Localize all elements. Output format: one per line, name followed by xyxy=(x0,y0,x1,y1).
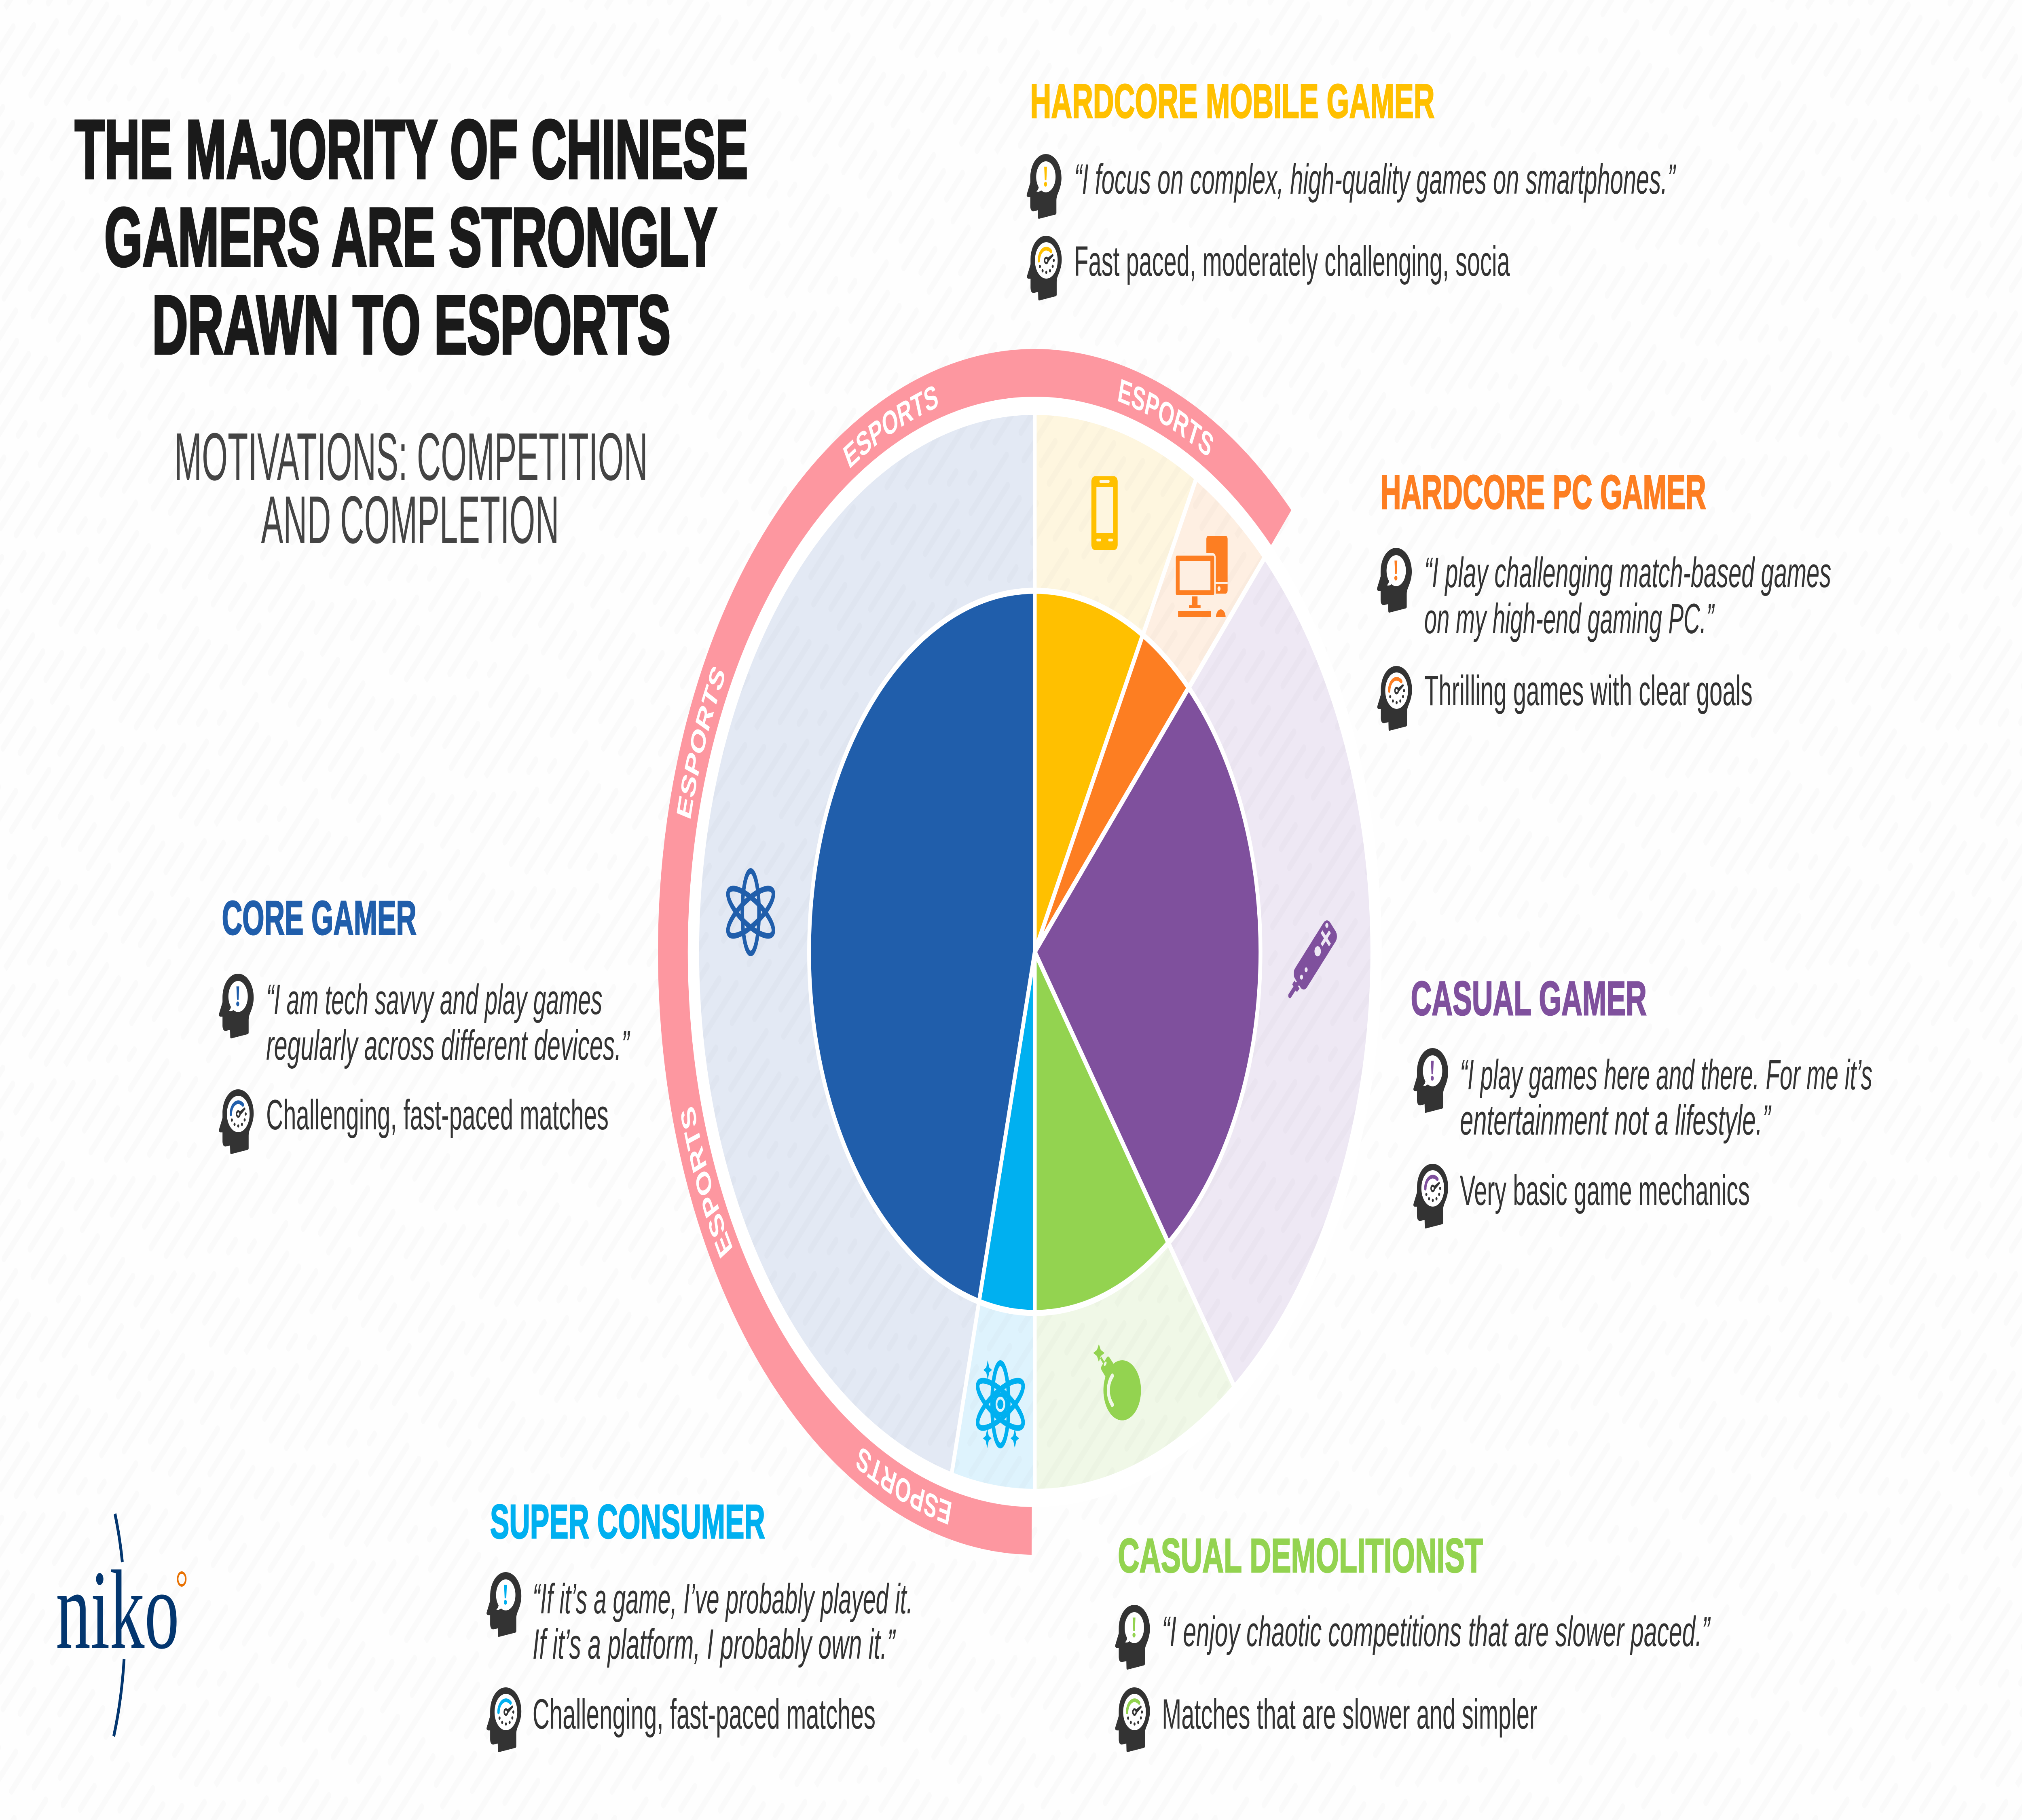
esports labels: ESPORTS xyxy=(676,1102,737,1264)
quote: on my high-end gaming PC.” xyxy=(1424,595,1715,643)
esports labels: ESPORTS xyxy=(1115,372,1217,465)
description: Fast paced, moderately challenging, socia xyxy=(1074,237,1510,285)
quote: “I play games here and there. For me it’s xyxy=(1460,1051,1872,1099)
segment: super consumer xyxy=(979,952,1035,1313)
heading: CORE GAMER xyxy=(222,891,417,945)
title: DRAWN TO ESPORTS xyxy=(152,279,670,371)
segment: casual gamer xyxy=(1035,688,1261,1243)
icon: head with gauge xyxy=(1413,1164,1448,1228)
title: THE MAJORITY OF CHINESE xyxy=(75,103,748,196)
heading: HARDCORE MOBILE GAMER xyxy=(1030,74,1435,128)
quote: “If it’s a game, I’ve probably played it. xyxy=(533,1575,913,1623)
segment: core gamer xyxy=(809,591,1035,1302)
logo: niko xyxy=(56,1514,186,1736)
subtitle: AND COMPLETION xyxy=(261,482,559,558)
heading: SUPER CONSUMER xyxy=(490,1495,765,1549)
logo: niko: niko xyxy=(56,1548,179,1672)
icon: head with gauge xyxy=(1027,236,1062,300)
esports labels xyxy=(672,372,1217,1532)
quote xyxy=(266,976,630,1069)
quote: “I play challenging match-based games xyxy=(1424,549,1831,596)
icon: head with exclamation xyxy=(219,974,254,1038)
icon: head with exclamation xyxy=(1377,548,1412,613)
donut chart xyxy=(683,388,1390,1520)
description: Thrilling games with clear goals xyxy=(1424,667,1753,714)
icon: head with gauge xyxy=(486,1687,521,1752)
esports labels: ESPORTS xyxy=(672,660,730,823)
icon: atom core gamer xyxy=(724,871,777,953)
icon: smartphone xyxy=(1091,476,1118,550)
quote: “I enjoy chaotic competitions that are slower paced.” xyxy=(1162,1608,1711,1655)
heading: CASUAL GAMER xyxy=(1411,972,1647,1025)
icon: desktop pc xyxy=(1175,536,1228,617)
quote: “I am tech savvy and play games xyxy=(266,976,602,1023)
quote xyxy=(1424,549,1831,643)
heading: CASUAL DEMOLITIONIST xyxy=(1118,1529,1483,1583)
esports labels: ESPORTS xyxy=(852,1439,954,1532)
esports labels: ESPORTS xyxy=(840,378,941,476)
quote xyxy=(1460,1051,1872,1144)
icon: atom super consumer xyxy=(974,1360,1027,1448)
quote: regularly across different devices.” xyxy=(266,1021,630,1069)
icon: game controller xyxy=(1290,917,1339,996)
inner pie xyxy=(809,591,1261,1313)
icon: bomb xyxy=(1093,1344,1141,1420)
icon: head with exclamation xyxy=(486,1572,521,1637)
panel: casual gamer xyxy=(1411,972,1872,1228)
quote: “I focus on complex, high-quality games on smartphones.” xyxy=(1074,155,1676,203)
panel: super consumer xyxy=(486,1495,913,1752)
icon: head with exclamation xyxy=(1413,1048,1448,1113)
segment: hardcore pc gamer xyxy=(1035,635,1189,952)
outer ring: pale segments xyxy=(683,388,1390,1520)
quote: If it’s a platform, I probably own it.” xyxy=(533,1620,896,1668)
icon: head with gauge xyxy=(1377,666,1412,731)
panel: hardcore pc gamer xyxy=(1377,465,1831,731)
segment: casual demolitionist xyxy=(1035,952,1168,1313)
subtitle xyxy=(174,419,648,558)
icon: head with gauge xyxy=(219,1089,254,1154)
segment: hardcore mobile gamer xyxy=(1035,591,1143,952)
description: Challenging, fast-paced matches xyxy=(266,1091,609,1139)
description: Very basic game mechanics xyxy=(1460,1167,1750,1214)
quote xyxy=(533,1575,913,1668)
icon: head with exclamation xyxy=(1027,154,1062,219)
panel: casual demolitionist xyxy=(1115,1529,1711,1752)
panel: core gamer xyxy=(219,891,630,1154)
icon: head with gauge xyxy=(1115,1687,1150,1752)
title: GAMERS ARE STRONGLY xyxy=(104,191,717,283)
ring dividers xyxy=(951,408,1267,1494)
subtitle: MOTIVATIONS: COMPETITION xyxy=(174,419,648,495)
heading: HARDCORE PC GAMER xyxy=(1381,465,1706,519)
description: Challenging, fast-paced matches xyxy=(533,1690,876,1738)
esports ring xyxy=(672,372,1281,1532)
title xyxy=(75,103,748,371)
panel: hardcore mobile gamer xyxy=(1027,74,1676,300)
quote: entertainment not a lifestyle.” xyxy=(1460,1096,1772,1144)
icon: head with exclamation xyxy=(1115,1605,1150,1670)
description: Matches that are slower and simpler xyxy=(1162,1690,1537,1738)
